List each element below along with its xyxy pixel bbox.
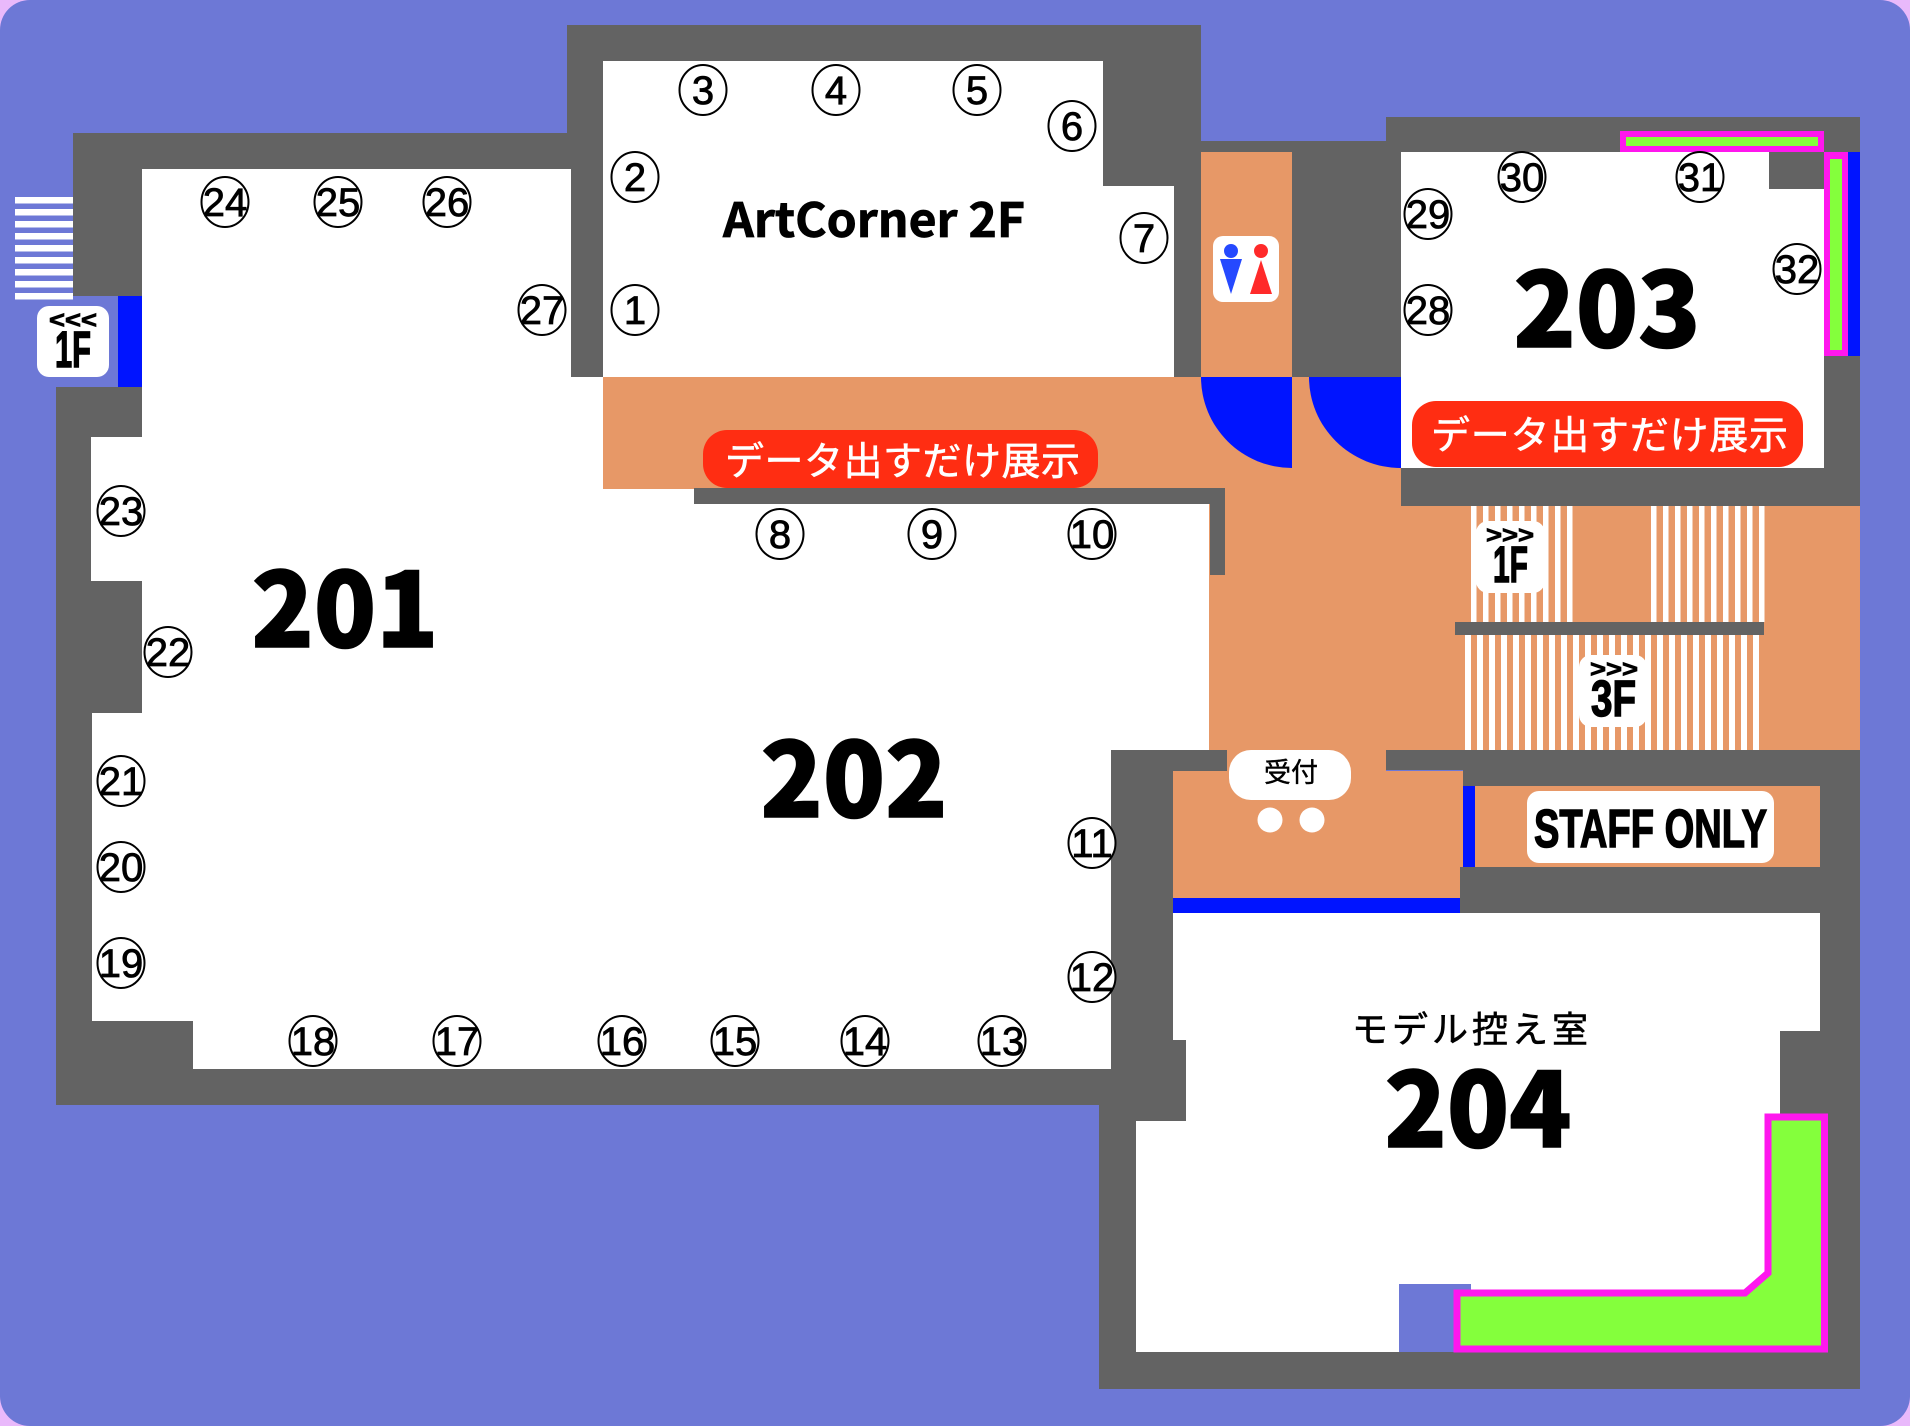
panel: doors [118, 152, 1860, 913]
lavender notch in room 204 [1399, 1284, 1471, 1352]
numbered spots: 9 [921, 513, 943, 557]
sign: down to 1F (stairs): 1F [1493, 536, 1528, 593]
panel: corridor partition wall [694, 488, 1463, 913]
numbered spots: 28 [1406, 289, 1450, 333]
panel: entrance stairs stripes [15, 197, 73, 300]
numbered spots: 17 [435, 1020, 479, 1064]
panel: 203 window displays [1620, 131, 1848, 356]
numbered spots: 20 [99, 846, 143, 890]
numbered spots: 11 [1071, 822, 1113, 866]
stairs: lower flight [1465, 635, 1759, 750]
badge: data-only exhibit (203): データ出すだけ展示 [1431, 415, 1788, 458]
panel: 204 display wall [1457, 1117, 1824, 1349]
stairs landing wall [1455, 622, 1764, 635]
numbered spots: 32 [1775, 248, 1819, 292]
heading: room 201: 201 [252, 528, 438, 677]
numbered spots: 1 [624, 289, 646, 333]
numbered spots: 14 [843, 1020, 887, 1064]
numbered spots: 19 [99, 942, 143, 986]
heading: ArtCorner 2F: ArtCorner 2F [722, 182, 1025, 251]
heading: room 204: 204 [1384, 1028, 1572, 1177]
panel: room 203 floor [1401, 152, 1824, 468]
heading: model waiting room label: モデル控え室 [1352, 1009, 1588, 1050]
panel: room 203 corner pillar [1769, 152, 1824, 189]
sign: reception: 受付 [1264, 758, 1318, 788]
sign: up to 3F: 3F [1591, 670, 1636, 727]
numbered spots: 12 [1070, 956, 1114, 1000]
badge: data-only exhibit (corridor): データ出すだけ展示 [725, 441, 1080, 484]
sign: up to 3F [1579, 655, 1647, 727]
numbered spots [98, 65, 1820, 1066]
numbered spots: 13 [980, 1020, 1024, 1064]
numbered spots: 3 [692, 69, 714, 113]
numbered spots: 22 [146, 631, 190, 675]
badge: data-only exhibit (203) [1412, 401, 1803, 467]
heading: room 202: 202 [760, 698, 948, 847]
numbered spots: 16 [600, 1020, 644, 1064]
panel: corridors [603, 152, 1860, 898]
numbered spots: 25 [316, 181, 360, 225]
badge: data-only exhibit (corridor) [703, 430, 1098, 488]
numbered spots: 18 [291, 1020, 335, 1064]
panel: room 204 floor [1136, 913, 1820, 1352]
numbered spots: 6 [1061, 105, 1083, 149]
stairs: upper flight [1471, 506, 1764, 622]
sign: reception [1229, 750, 1351, 800]
numbered spots: 10 [1070, 513, 1114, 557]
sign: staff only [1527, 791, 1774, 863]
numbered spots: 7 [1133, 217, 1155, 261]
numbered spots: 4 [825, 69, 847, 113]
sign: down to 1F (west) [37, 306, 109, 378]
numbered spots: 8 [769, 513, 791, 557]
sign: up to 3F: >>> [1590, 656, 1638, 683]
panel: ArtCorner floor [603, 61, 1174, 377]
numbered spots: 27 [520, 289, 564, 333]
panel: rooms 201 and 202 floor [91, 169, 1209, 1069]
numbered spots: 24 [203, 181, 247, 225]
sign: down to 1F (west): 1F [55, 321, 91, 378]
heading: room 203: 203 [1514, 228, 1700, 377]
sign: down to 1F (west): <<< [49, 307, 97, 334]
numbered spots: 5 [966, 69, 988, 113]
numbered spots: 31 [1678, 156, 1722, 200]
sign: down to 1F (stairs) [1476, 521, 1545, 593]
numbered spots: 21 [99, 760, 143, 804]
sign: down to 1F (stairs): >>> [1486, 522, 1534, 549]
numbered spots: 29 [1406, 193, 1450, 237]
icon: restroom sign [1213, 236, 1279, 302]
icon: reception seats [1258, 808, 1324, 832]
numbered spots: 23 [99, 490, 143, 534]
numbered spots: 30 [1500, 156, 1544, 200]
sign: staff only: STAFF ONLY [1534, 799, 1767, 859]
numbered spots: 2 [624, 156, 646, 200]
numbered spots: 15 [713, 1020, 757, 1064]
numbered spots: 26 [425, 181, 469, 225]
